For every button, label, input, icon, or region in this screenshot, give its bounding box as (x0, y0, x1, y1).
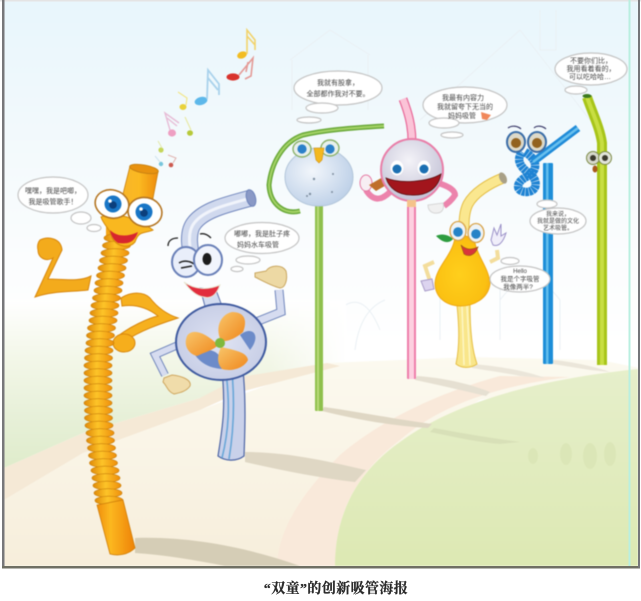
note: small red (168, 155, 176, 167)
left arm shaped as a note (35, 238, 91, 297)
upper straw with bend (189, 198, 251, 262)
bent straw (587, 97, 602, 365)
hand left (421, 279, 434, 291)
straw foot (97, 500, 135, 555)
speech bubble: blue straw: 我就是做的文化 (537, 217, 579, 225)
ball head (381, 139, 443, 201)
right arm (118, 293, 178, 342)
speech bubble: lime straw (555, 53, 627, 94)
speech bubble: green straw: 全部都作我对不要。 (306, 89, 370, 98)
beak (314, 148, 324, 163)
glasses eyes (168, 234, 222, 277)
note: lime (185, 117, 193, 136)
speech bubble: green straw: 我就有股拿， (317, 78, 359, 87)
note: small lime (158, 141, 164, 153)
mouth (592, 166, 598, 172)
ground shadows (135, 360, 610, 566)
figure-eight coil (518, 152, 536, 192)
collar (407, 200, 416, 207)
speech bubble: orange straw: 我是吸管歌手！ (28, 197, 78, 206)
speech bubble: pear straw (490, 258, 550, 292)
arm left (155, 345, 178, 375)
character: orange bendy straw (35, 163, 178, 555)
speech bubble: pear straw: 我是个字吸管 (500, 274, 540, 283)
note: pink (165, 113, 179, 137)
long loop (269, 126, 384, 212)
speech bubble: pink straw (423, 87, 507, 138)
speech bubble: orange straw: 嘿嘿，我是吧唧， (25, 186, 81, 195)
speech bubble: lime straw: 我用看着看的， (566, 64, 616, 73)
arms (425, 250, 498, 284)
character: green loop straw (269, 126, 384, 411)
mouth (184, 282, 220, 298)
speech bubble: pear straw: 我像两半? (503, 282, 533, 291)
pear body (435, 236, 490, 306)
speech bubble: blue straw: 艺术吸管。 (543, 224, 573, 232)
caption: “双童”的创新吸管海报 (264, 580, 408, 597)
note: gold (236, 30, 255, 60)
right hand (113, 334, 135, 352)
speech bubble: pear straw: Hello (513, 269, 527, 275)
lower straw (407, 200, 416, 379)
eyes (507, 126, 546, 152)
note: small cyan (155, 156, 163, 166)
hand left (163, 375, 190, 394)
speech bubble: blue straw: 我来说， (546, 210, 570, 218)
speech bubble: fan straw: 妈妈水车吸管 (237, 240, 279, 249)
character: lime straw (582, 94, 612, 365)
faint watermark on the grass (528, 442, 616, 469)
chocolate bar (369, 177, 390, 191)
fist (255, 266, 287, 288)
beak and lips (101, 215, 153, 246)
bent straw top (464, 178, 503, 230)
fan blades (186, 312, 248, 370)
eyes (450, 222, 484, 242)
note: yellow (178, 92, 187, 110)
stem (456, 305, 477, 367)
vertical straw (315, 205, 323, 411)
note: blue (194, 70, 219, 107)
character: blue straw (507, 126, 578, 364)
left hand (360, 175, 372, 191)
neck (200, 288, 222, 310)
left grass (4, 300, 345, 468)
top straw (403, 99, 412, 142)
music notes (155, 30, 255, 167)
mouth (386, 174, 441, 195)
speech bubble: blue straw (530, 200, 586, 234)
vertical straw (543, 163, 553, 364)
faint background buildings (60, 10, 590, 350)
mouth (461, 245, 478, 256)
eye right (126, 195, 164, 229)
speech bubble: pink straw: 我就留夸下无当的 (437, 102, 493, 111)
speech bubble: lime straw: 可以吃哈哈… (569, 72, 611, 81)
note: red (226, 58, 253, 81)
diagonal straw (533, 128, 578, 162)
eyes (390, 160, 430, 176)
right arm (438, 183, 455, 206)
hand victory (491, 224, 506, 246)
speech bubble: green straw (294, 71, 382, 123)
right grass (335, 369, 638, 566)
speech bubble: pink straw: 我最有内容力 (442, 93, 484, 102)
peach path border, right (277, 376, 570, 566)
character: yellow pear straw (421, 171, 509, 367)
eyes (586, 152, 612, 164)
character: fan straw (155, 189, 287, 460)
speech bubble: orange straw (18, 177, 101, 232)
speech bubble: fan straw (225, 222, 299, 272)
fan disc (176, 304, 266, 380)
speech bubble: fan straw: 嘟嘟，我是肚子疼 (234, 229, 290, 238)
corrugated straw body (84, 225, 132, 505)
character: pink straw (360, 99, 455, 379)
speech bubble: lime straw: 不要你们比， (570, 56, 612, 65)
eye left (92, 186, 132, 222)
straw top (120, 166, 158, 214)
grass fade towards the centre (270, 300, 346, 370)
leaf (436, 235, 453, 242)
ball body (285, 148, 353, 206)
speech bubble: pink straw: 妈妈吸管 (448, 111, 476, 120)
arm right (256, 290, 281, 322)
left arm (366, 190, 390, 199)
peach path border, left (4, 363, 340, 500)
lower straw (218, 370, 245, 460)
mouth (110, 230, 138, 243)
fan hub (215, 338, 225, 348)
right hand (428, 203, 444, 213)
eyes (293, 140, 339, 157)
cream ground path (4, 357, 640, 566)
